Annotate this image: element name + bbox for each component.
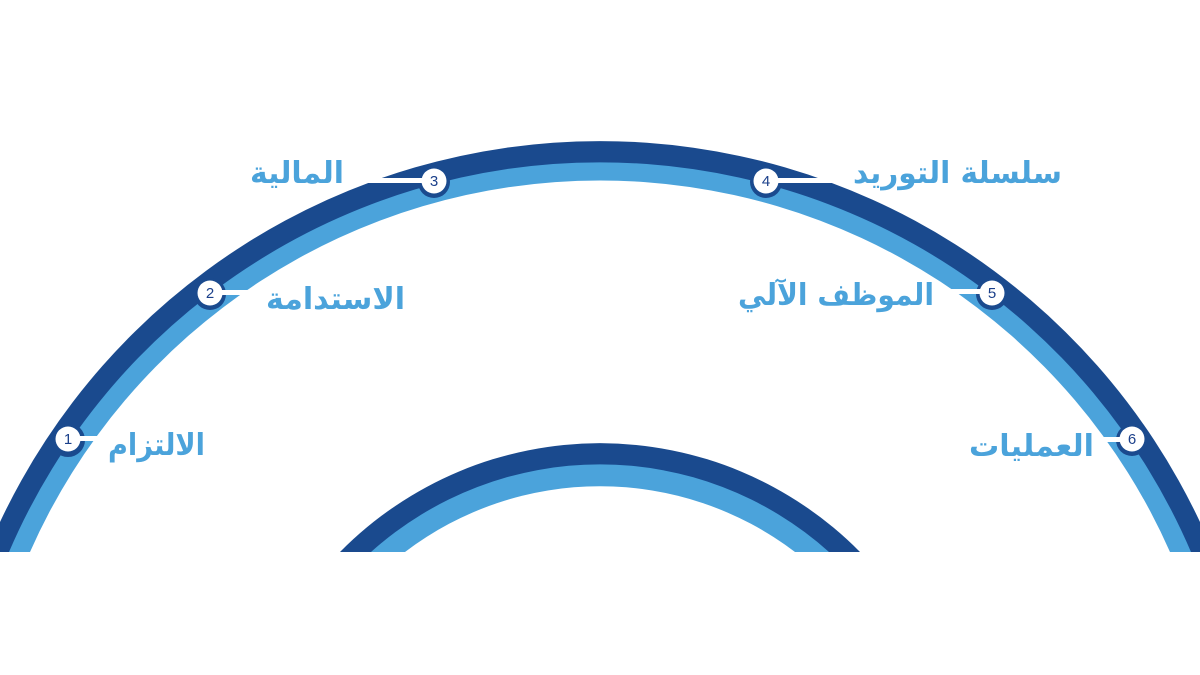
label 1: الالتزام [108,428,205,463]
label 6: العمليات [969,429,1094,464]
marker 4 with leader: 4 [762,173,770,190]
inner arc [340,443,860,552]
marker 6 with leader: 6 [1128,431,1136,448]
label 4: سلسلة التوريد [853,156,1062,191]
label 3: المالية [250,156,344,191]
outer arc [0,141,1200,552]
marker 3 with leader [360,166,450,198]
marker 1 with leader: 1 [64,431,72,448]
marker 5 with leader [950,278,1008,310]
marker 2 with leader [194,278,260,310]
label 5: الموظف الآلي [738,278,934,313]
marker 1 with leader [51,423,102,457]
marker 6 with leader [1100,424,1148,456]
label 2: الاستدامة [266,282,405,317]
marker 2 with leader: 2 [206,285,214,302]
marker 5 with leader: 5 [988,285,996,302]
marker 3 with leader: 3 [430,173,438,190]
marker 4 with leader [750,166,842,198]
